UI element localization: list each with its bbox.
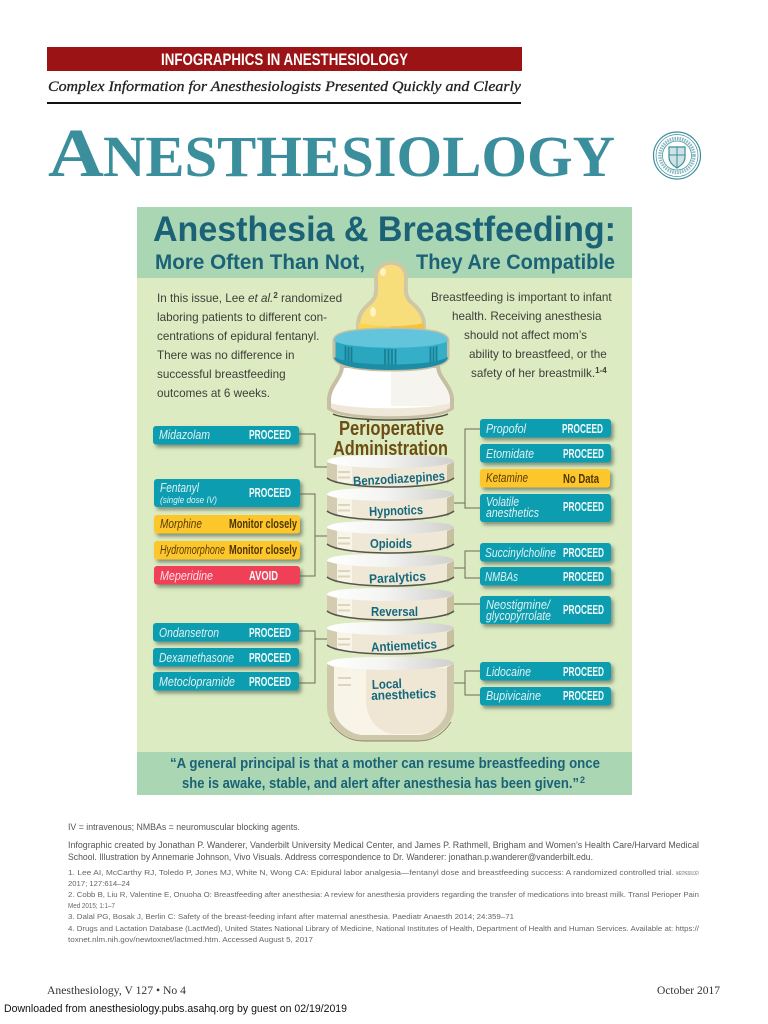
title: Anesthesia & Breastfeeding: (153, 210, 616, 249)
layer: antiemetics (327, 622, 454, 655)
intro text: left: successful breastfeeding (157, 368, 286, 381)
intro text: right: safety of her breastmilk. (471, 367, 595, 380)
right pills: hypnotics (480, 419, 611, 522)
right pill: neostigmine: PROCEED (563, 603, 604, 617)
footer quote band: she is awake, stable, and alert after anesthesia has been given.” (182, 775, 579, 792)
pill: lidocaine (480, 662, 611, 680)
layer: benzodiazepines: Benzodiazepines (353, 468, 445, 489)
pill: dexamethasone: PROCEED (249, 651, 291, 665)
pill: fentanyl: PROCEED (249, 486, 291, 500)
subtitle right: They Are Compatible (416, 251, 615, 274)
heading: perioperative administration: Administration (333, 438, 448, 460)
references: 1. Lee AI, McCarthy RJ, Toledo P, Jones MJ, White N, Wong CA: Epidural labor analgesia—fentanyl dose and breastfeeding success: A randomized controlled trial. (68, 868, 674, 877)
pill: meperidine: AVOID (249, 569, 278, 583)
journal masthead: A (48, 115, 104, 191)
references (68, 868, 700, 944)
layer: paralytics: Paralytics (369, 568, 426, 586)
pill: midazolam: Midazolam (159, 428, 210, 442)
layer: paralytics (327, 554, 454, 586)
pill: hydromorphone: Monitor closely (229, 543, 297, 557)
pill: propofol: PROCEED (562, 422, 603, 436)
pill: volatile anesthetics (480, 494, 611, 522)
intro text: left: laboring patients to different con- (157, 311, 327, 324)
pill: hydromorphone (154, 541, 300, 560)
right pills: local anesthetics (480, 662, 611, 706)
pill: volatile anesthetics: Volatile (486, 495, 519, 509)
subtitle left: More Often Than Not, (155, 251, 365, 274)
right pill: neostigmine: Neostigmine/ (486, 598, 551, 612)
pill: lidocaine: PROCEED (563, 665, 604, 679)
footer quote band: 2 (580, 775, 585, 785)
download notice: Downloaded from anesthesiology.pubs.asahq.org by guest on 02/19/2019 (4, 1003, 347, 1015)
heading: perioperative administration: Perioperative (339, 418, 444, 440)
bottle shoulder (329, 366, 452, 420)
pill: morphine (154, 515, 300, 534)
right pill: neostigmine: glycopyrrolate (486, 609, 551, 623)
abbreviations note: IV = intravenous; NMBAs = neuromuscular blocking agents. (68, 822, 300, 832)
pill: nmbas: PROCEED (563, 570, 604, 584)
right pills: paralytics (480, 543, 611, 586)
pill: nmbas: NMBAs (485, 570, 518, 584)
references: toxnet.nlm.nih.gov/newtoxnet/lactmed.htm. Accessed August 5, 2017 (68, 935, 313, 944)
icon: society seal (654, 132, 700, 179)
pill: etomidate (480, 444, 611, 462)
pill: succinylcholine (480, 543, 611, 562)
bottle stack (327, 263, 454, 741)
footer quote band (137, 752, 632, 795)
left pills: benzodiazepines (153, 426, 299, 444)
pill: ketamine: No Data (563, 472, 600, 486)
pill: etomidate: PROCEED (563, 447, 604, 461)
references: 2. Cobb B, Liu R, Valentine E, Onuoha O: Breastfeeding after anesthesia: A review for anesthesia providers regarding the transfer of medications into breast milk. Transl Perioper Pain (68, 890, 699, 899)
intro text: left: 2 (273, 291, 278, 300)
layer: reversal: Reversal (371, 604, 418, 619)
intro text: left: There was no difference in (157, 349, 295, 362)
layer: opioids: Opioids (370, 536, 412, 551)
intro text: right: should not affect mom’s (464, 329, 587, 342)
tagline: Complex Information for Anesthesiologists Presented Quickly and Clearly (48, 79, 521, 95)
red banner (47, 47, 522, 71)
pill: midazolam: PROCEED (249, 428, 291, 442)
footer: date: October 2017 (657, 985, 720, 997)
pill: ondansetron (153, 623, 299, 642)
intro text: left: randomized (278, 292, 342, 305)
intro text: right: health. Receiving anesthesia (452, 310, 602, 323)
footer quote band: “A general principal is that a mother can resume breastfeeding once (170, 755, 600, 772)
heading: perioperative administration (333, 418, 448, 460)
pill: metoclopramide: PROCEED (249, 675, 291, 689)
pill: volatile anesthetics: anesthetics (486, 506, 539, 520)
right pill: neostigmine (480, 596, 611, 624)
intro text: right: Breastfeeding is important to infant (431, 291, 612, 304)
bottle base: local anesthetics (327, 657, 454, 741)
red banner: INFOGRAPHICS IN ANESTHESIOLOGY (161, 50, 409, 69)
pill: succinylcholine: PROCEED (563, 546, 604, 560)
pill: dexamethasone: Dexamethasone (159, 651, 234, 665)
intro text: right (431, 291, 612, 380)
bottle nipple (358, 263, 424, 338)
pill: bupivicaine: PROCEED (563, 689, 604, 703)
pill: meperidine (154, 566, 300, 584)
pill: hydromorphone: Hydromorphone (160, 543, 225, 557)
pill: bupivicaine (480, 687, 611, 706)
layer: hypnotics (327, 488, 454, 520)
intro text: right: 1-4 (595, 366, 607, 375)
panel: infographic (137, 207, 632, 795)
layer: benzodiazepines (327, 455, 454, 489)
connector lines (299, 429, 480, 695)
pill: succinylcholine: Succinylcholine (485, 546, 556, 560)
left pills: opioids (154, 479, 300, 584)
pill: volatile anesthetics: PROCEED (563, 500, 604, 514)
references: 2017; 127:614–24 (68, 879, 130, 888)
credits: Infographic created by Jonathan P. Wanderer, Vanderbilt University Medical Center, and James P. Rathmell, Brigham and Women’s Health Care/Harvard Medical (68, 840, 699, 850)
left pills: antiemetics (153, 623, 299, 690)
pill: ondansetron: Ondansetron (159, 626, 219, 640)
pill: meperidine: Meperidine (160, 569, 213, 583)
pill: fentanyl: Fentanyl (160, 481, 200, 495)
pill: metoclopramide: Metoclopramide (159, 675, 235, 689)
references: 4. Drugs and Lactation Database (LactMed), United States National Library of Medicine, National Institutes of Health, Department of Health and Human Services. Available at: https:// (68, 924, 700, 933)
references: Med 2015; 1:1–7 (68, 901, 115, 910)
references: 3. Dalal PG, Bosak J, Berlin C: Safety of the breast-feeding infant after maternal anesthesia. Paediatr Anaesth 2014; 24:359–71 (68, 912, 514, 921)
pill: dexamethasone (153, 648, 299, 666)
pill: ondansetron: PROCEED (249, 626, 291, 640)
intro text: right: ability to breastfeed, or the (469, 348, 607, 361)
pill: fentanyl: (single dose IV) (160, 495, 217, 506)
pill: etomidate: Etomidate (486, 447, 534, 461)
pill: bupivicaine: Bupivicaine (486, 689, 541, 703)
pill: midazolam (153, 426, 299, 444)
layer: antiemetics: Antiemetics (371, 636, 437, 655)
pill: ketamine (480, 469, 610, 488)
pill: fentanyl (154, 479, 300, 507)
pill: ketamine: Ketamine (486, 471, 528, 485)
references: ANESTHESIOLOGY (676, 871, 699, 877)
pill: metoclopramide (153, 672, 299, 690)
header band (137, 207, 632, 278)
pill: propofol (480, 419, 611, 438)
pill: propofol: Propofol (486, 422, 527, 436)
pill: nmbas (480, 567, 611, 586)
intro text: left: outcomes at 6 weeks. (157, 387, 270, 400)
intro text: left: centrations of epidural fentanyl. (157, 330, 319, 343)
label: local anesthetics: anesthetics (371, 686, 436, 703)
credits: School. Illustration by Annemarie Johnson, Vivo Visuals. Address correspondence to Dr. Wanderer: jonathan.p.wanderer@vanderbilt.edu. (68, 852, 593, 862)
intro text: left: In this issue, Lee et al. (157, 292, 273, 305)
bottle cap (334, 329, 448, 370)
pill: lidocaine: Lidocaine (486, 665, 531, 679)
label: local anesthetics (371, 675, 436, 703)
credits (68, 840, 699, 862)
layer: hypnotics: Hypnotics (369, 502, 423, 519)
intro text: left (157, 291, 342, 400)
layer: reversal (327, 588, 454, 620)
label: local anesthetics: Local (372, 676, 402, 692)
pill: morphine: Monitor closely (229, 517, 297, 531)
footer: issue: Anesthesiology, V 127 • No 4 (47, 985, 186, 997)
pill: morphine: Morphine (160, 517, 202, 531)
layer: opioids (327, 521, 454, 553)
journal masthead: NESTHESIOLOGY (103, 124, 615, 189)
